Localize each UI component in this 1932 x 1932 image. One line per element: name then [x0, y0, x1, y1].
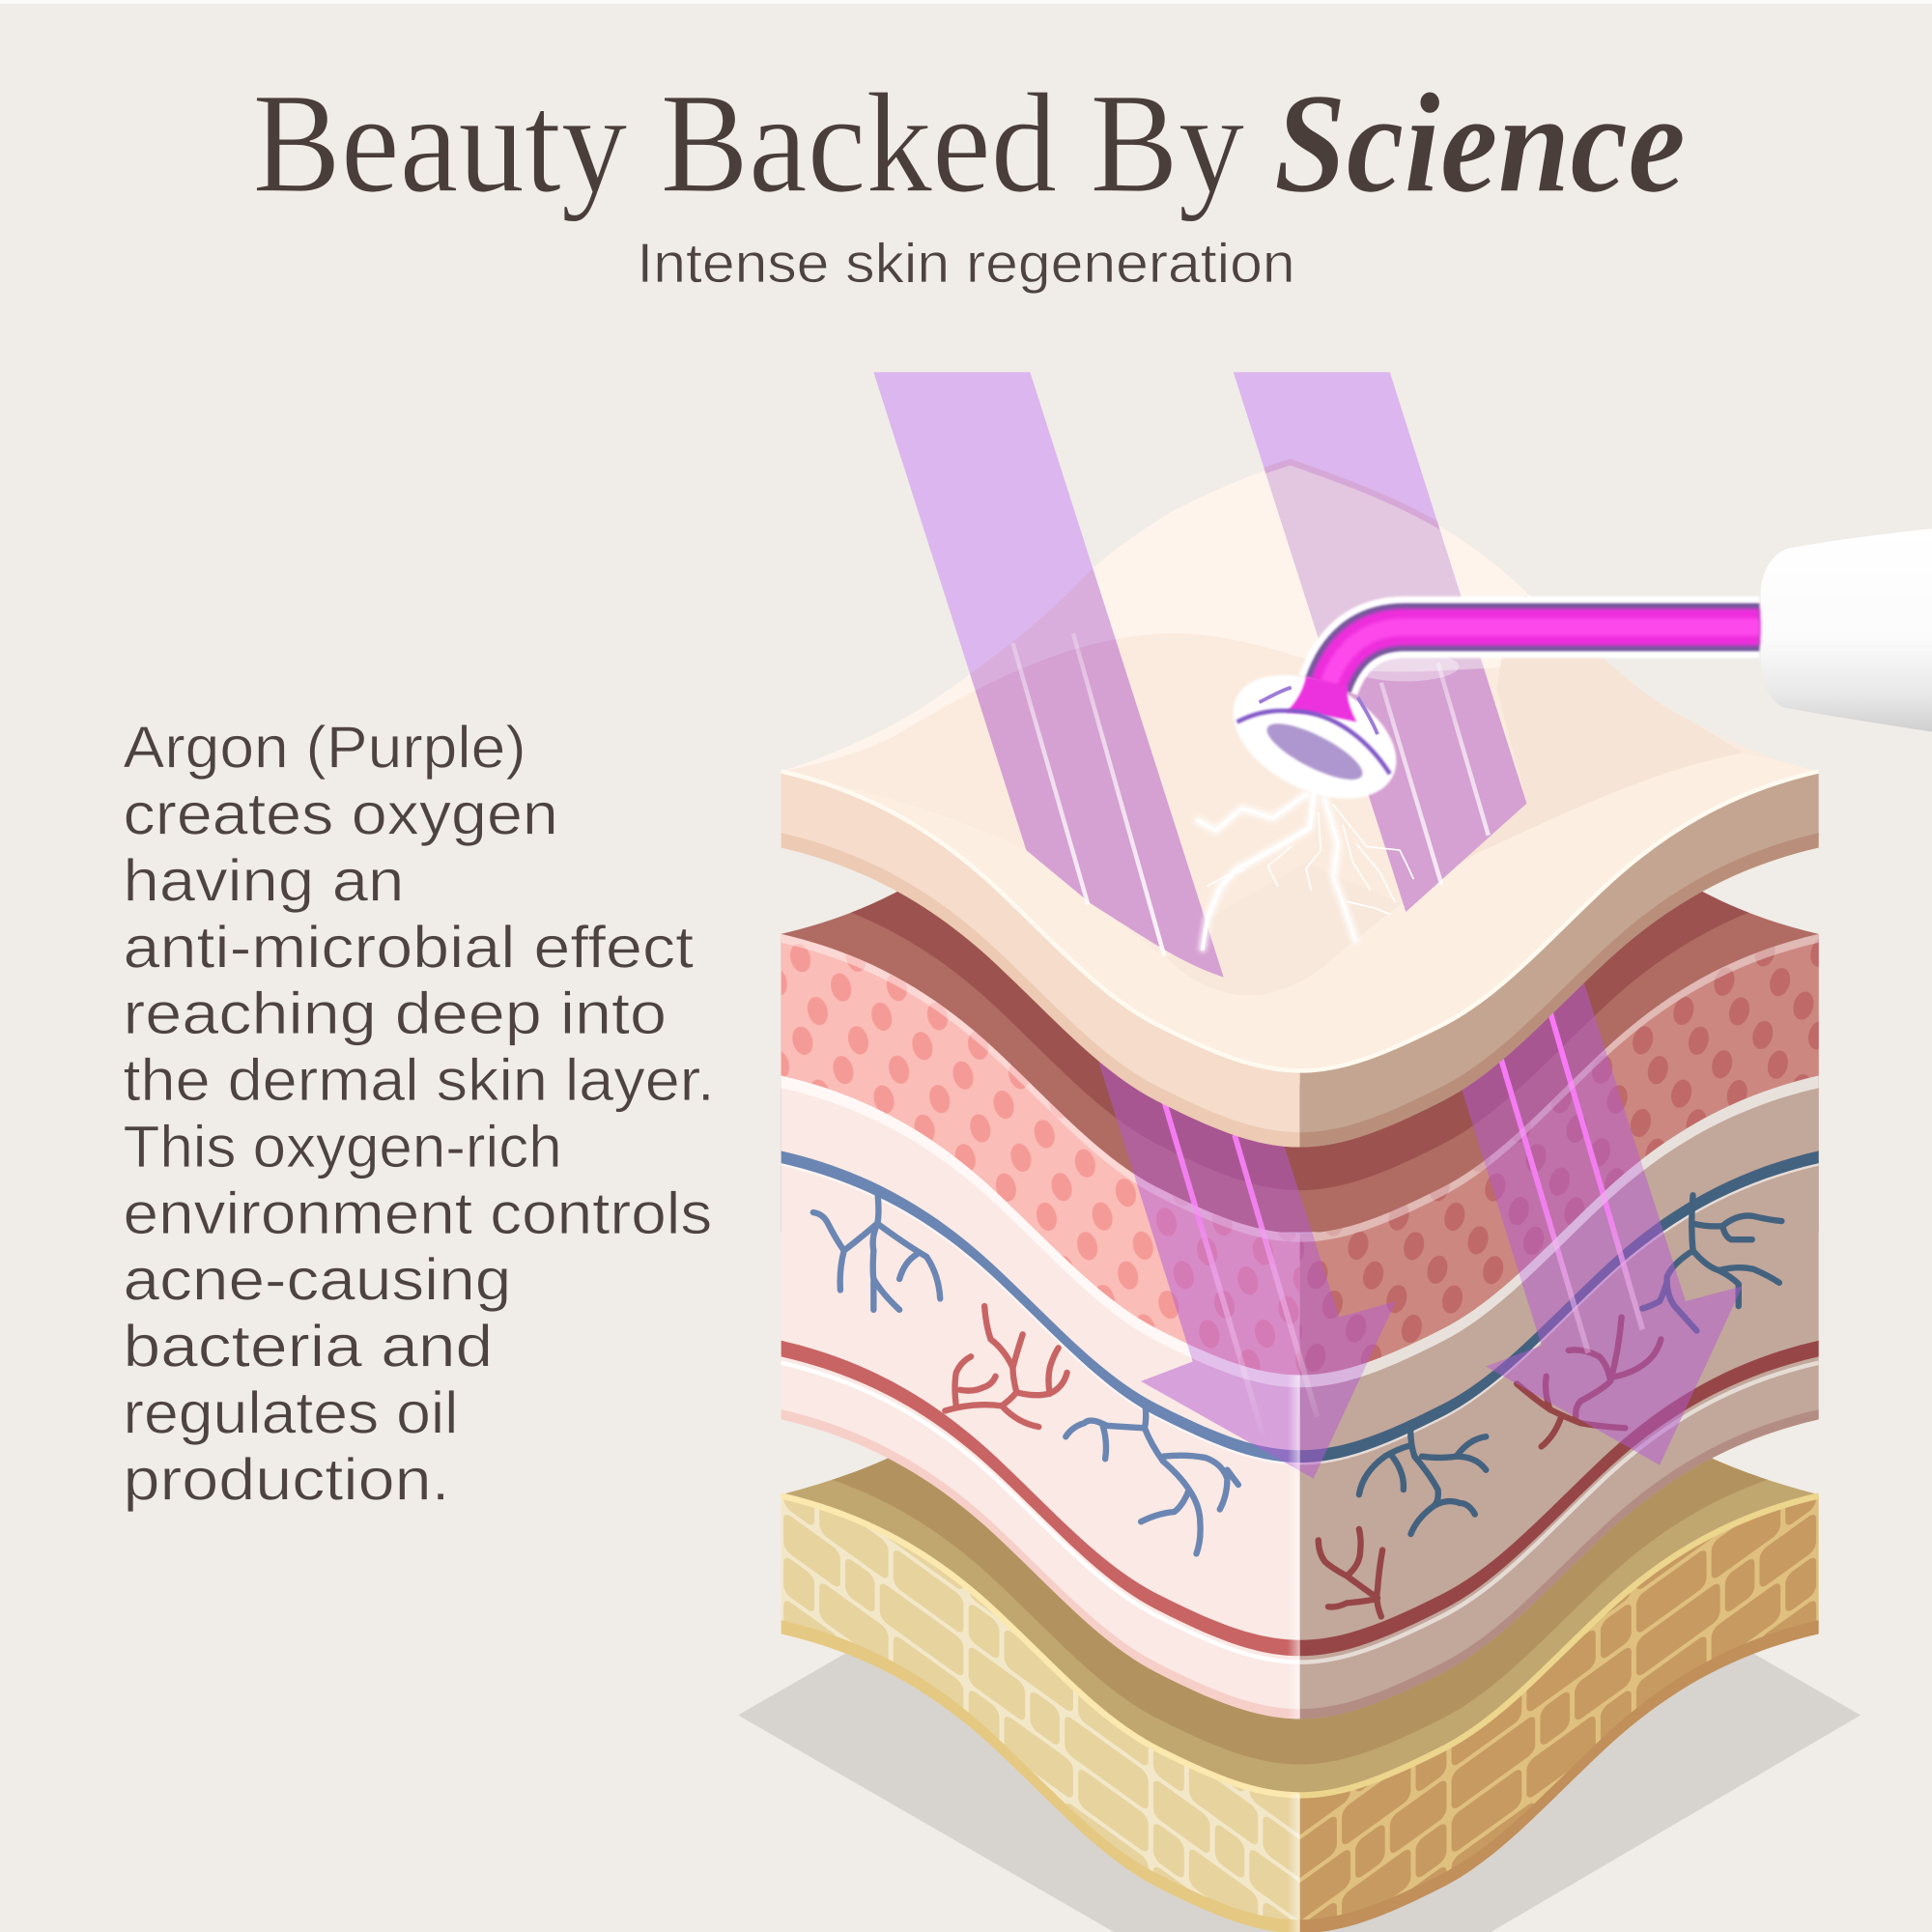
epidermis right face — [1300, 771, 1819, 1148]
translucent bands over arrows — [781, 934, 1819, 1387]
bottom band — [781, 1409, 1300, 1719]
device handle — [1761, 528, 1932, 732]
epidermis front highlight — [781, 771, 1819, 1070]
right beam over skin — [1264, 459, 1526, 912]
fat top surface — [781, 1417, 1819, 1794]
vein: blue right upper — [1642, 1195, 1781, 1331]
body text: acne-causing — [124, 1247, 511, 1313]
fat right face with brick pattern — [1300, 1494, 1819, 1932]
body text: bacteria and — [124, 1314, 493, 1379]
white line under blue vessel — [781, 1164, 1819, 1463]
blue vessel, right — [1300, 1151, 1819, 1463]
beam right — [1234, 372, 1526, 912]
body text — [124, 715, 715, 1512]
head body — [1212, 650, 1417, 824]
body text: This oxygen-rich — [124, 1114, 562, 1179]
beam stripes — [1498, 1003, 1642, 1353]
subtitle: Intense skin regeneration — [637, 233, 1295, 295]
device glass tube — [1328, 627, 1759, 685]
body text: the dermal skin layer. — [124, 1047, 715, 1113]
pale dermis face, left — [781, 1076, 1300, 1719]
body text: Argon (Purple) — [124, 715, 526, 781]
vein: red right lower — [1319, 1529, 1382, 1616]
device electrode head — [1212, 650, 1417, 824]
body text: having an — [124, 847, 404, 913]
fat right lower band — [1300, 1620, 1819, 1932]
pink papillary band, left — [781, 934, 1300, 1375]
red vessel, left — [781, 1341, 1300, 1656]
pale dermis face, right — [1300, 1076, 1819, 1719]
disc inner — [1261, 713, 1369, 790]
vein: blue left lower — [1065, 1401, 1238, 1553]
vein: blue left upper — [813, 1190, 940, 1310]
purple rim — [1237, 711, 1390, 774]
epidermis right lower band — [1300, 833, 1819, 1148]
title: Beauty Backed By — [252, 65, 1244, 223]
body text: reaching deep into — [124, 980, 667, 1046]
lightning — [1198, 788, 1413, 949]
beam stripes — [1163, 1097, 1318, 1439]
fat top highlight, left — [781, 1495, 1300, 1795]
neck — [1287, 676, 1356, 722]
beam stripes — [1012, 634, 1489, 956]
epidermis inner surface — [781, 634, 1819, 1084]
arrow: lower right beam — [1422, 961, 1743, 1465]
body text: environment controls — [124, 1180, 712, 1246]
white line under red vessel — [781, 1363, 1300, 1662]
skin layer: dermis — [781, 892, 1819, 1719]
fat left lower band — [781, 1620, 1300, 1932]
epidermis back silhouette — [781, 462, 1819, 1070]
fat left face with brick pattern — [781, 1494, 1300, 1932]
arrow: lower left beam — [1067, 961, 1396, 1479]
pink dots, left — [781, 934, 1300, 1375]
body text: production. — [124, 1446, 450, 1512]
centre seam highlight: fat — [1288, 1794, 1300, 1932]
skin layer: epidermis — [781, 462, 1819, 1148]
dome accents — [1260, 688, 1378, 734]
body text: anti-microbial effect — [124, 914, 694, 980]
dermis top surface — [781, 850, 1819, 1233]
body text: regulates oil — [124, 1379, 458, 1445]
epidermis left face — [781, 771, 1300, 1148]
epidermis front lip — [781, 753, 1819, 1070]
epidermis right back shading — [1406, 595, 1744, 912]
centre seam highlight: dermis — [1288, 1375, 1300, 1719]
red vessel, right — [1300, 1341, 1819, 1656]
white band — [781, 1076, 1300, 1387]
beam left — [873, 372, 1224, 977]
skin layer: subcutaneous fat — [781, 1417, 1820, 1932]
vein: red left — [945, 1306, 1067, 1427]
blue vessel, left — [781, 1151, 1300, 1463]
vein: blue right lower — [1359, 1423, 1486, 1534]
epidermis left lower band — [781, 833, 1300, 1148]
title: Science — [1274, 65, 1686, 223]
pink band top sheen — [781, 934, 1819, 1242]
left beam over skin — [970, 568, 1223, 978]
floor shadow — [738, 1392, 1861, 1932]
translucent glow under tube — [1350, 652, 1459, 681]
fat top highlight, right — [1300, 1495, 1819, 1795]
pink papillary band, right — [1300, 934, 1819, 1375]
pink dots, right — [1300, 934, 1819, 1375]
vein: red right upper — [1517, 1318, 1661, 1446]
upper light beams — [873, 372, 1526, 978]
valley shading — [1167, 863, 1406, 996]
body text: creates oxygen — [124, 781, 558, 847]
